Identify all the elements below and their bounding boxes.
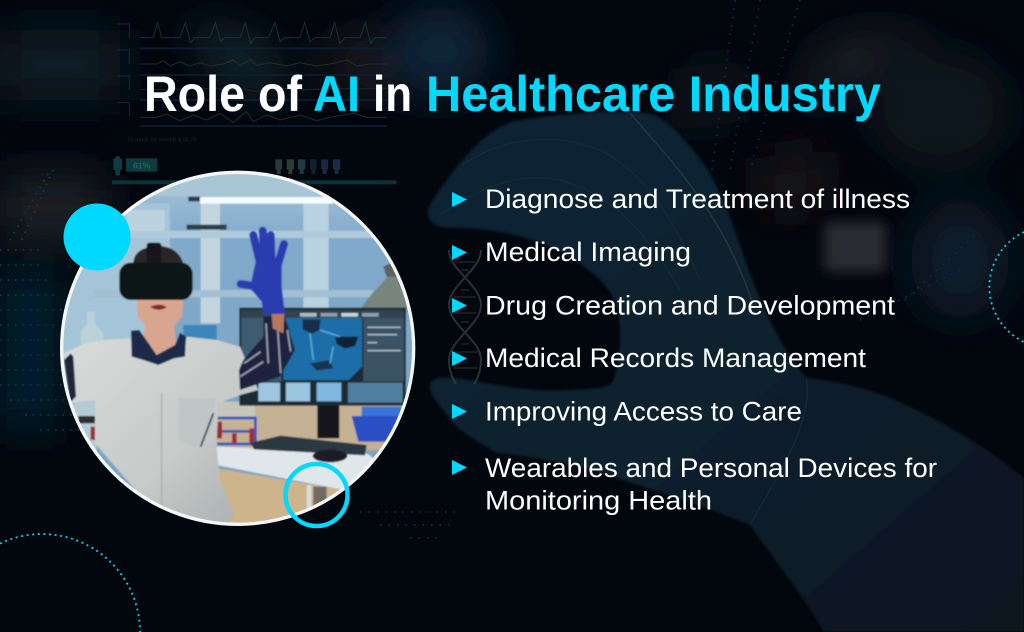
sleeve xyxy=(239,317,295,390)
percentage badge xyxy=(126,158,157,172)
people row xyxy=(275,159,340,174)
panel: photo of doctor using VR headset xyxy=(60,170,417,527)
dotted arc bottom left xyxy=(0,534,140,632)
item: access to care: Improving Access to Care xyxy=(485,396,802,426)
progress bar xyxy=(112,180,397,184)
list of AI roles xyxy=(452,184,937,516)
computer monitor xyxy=(239,308,406,438)
item: diagnose: Diagnose and Treatment of illness xyxy=(485,184,910,214)
gloved hand silhouette xyxy=(428,112,1024,632)
title: AI xyxy=(313,66,360,122)
monitor stats row xyxy=(112,137,397,184)
glove xyxy=(241,231,284,287)
dotted arc right xyxy=(989,232,1024,342)
dotted network pattern left xyxy=(0,170,85,430)
item: wearables xyxy=(452,453,937,516)
person icon xyxy=(113,156,122,175)
percentage badge: 61% xyxy=(133,160,151,170)
dna helix xyxy=(449,250,481,384)
decorative solid cyan circle xyxy=(64,204,130,270)
doctor in lab coat xyxy=(63,231,295,527)
blurred lab square xyxy=(824,222,886,272)
item: wearables: Monitoring Health xyxy=(485,486,712,516)
title xyxy=(144,66,881,122)
keyboard and mouse xyxy=(251,436,367,462)
neck and face xyxy=(137,297,183,360)
decorative cyan ring xyxy=(286,464,348,526)
collar xyxy=(131,330,186,365)
tube racks xyxy=(217,402,402,445)
lab coat xyxy=(63,337,258,527)
item: drug creation: Drug Creation and Development xyxy=(485,290,896,320)
tan wall and desk xyxy=(216,404,402,523)
item: medical records: Medical Records Management xyxy=(485,343,867,373)
stats caption: 90 mm/s 90 mm/hB $ 05.25 xyxy=(127,137,197,143)
lab wall and shelves xyxy=(63,174,412,491)
item: wearables: Wearables and Personal Devices for xyxy=(485,453,937,483)
title: in xyxy=(373,66,412,122)
monitor ECG traces xyxy=(117,23,387,126)
dotted network pattern top xyxy=(360,0,980,538)
title: Healthcare Industry xyxy=(426,66,881,122)
title: Role of xyxy=(144,66,302,122)
item: imaging: Medical Imaging xyxy=(485,237,691,267)
